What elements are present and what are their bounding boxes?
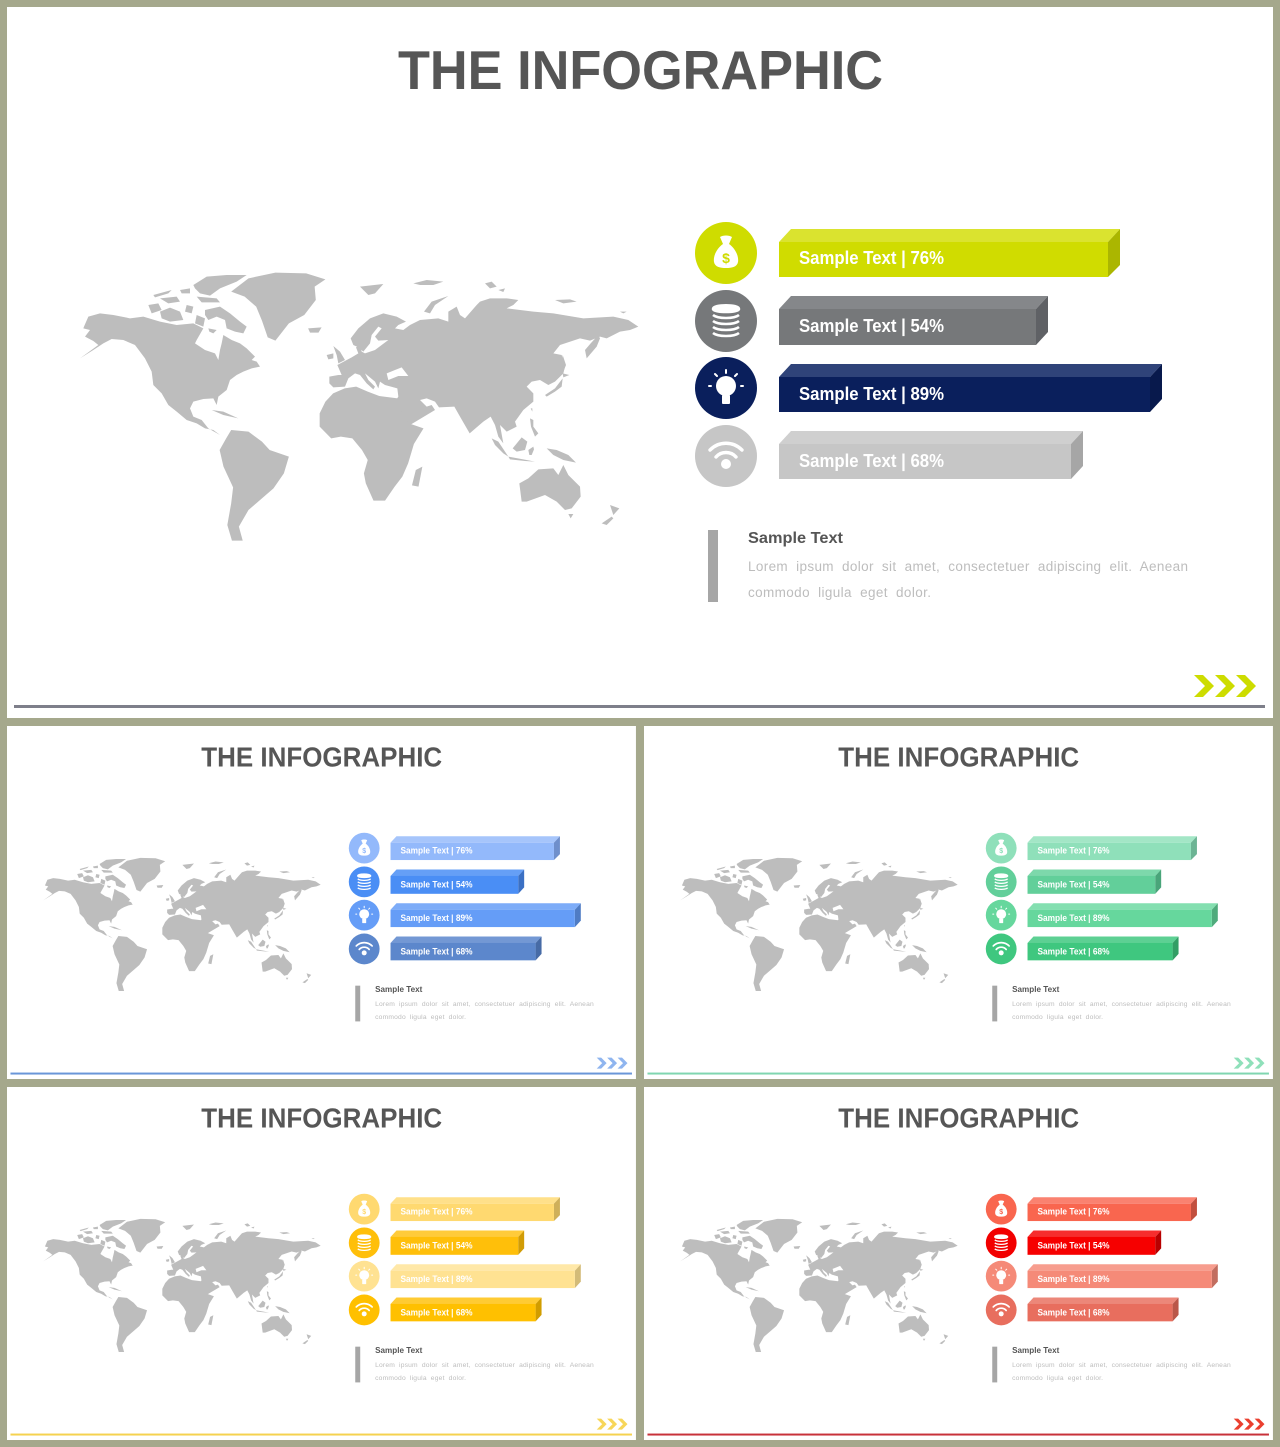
bar: 76%: Sample Text | 76% [799, 248, 944, 268]
text block [375, 1346, 594, 1382]
icon: coins [349, 867, 380, 897]
world map [43, 858, 321, 991]
title: THE INFOGRAPHIC [838, 742, 1079, 773]
text block: Sample Text [1012, 1346, 1060, 1355]
icon: coins [986, 867, 1017, 897]
icon: light bulb [986, 900, 1017, 931]
arrows [1234, 1058, 1265, 1069]
icon: wifi [349, 934, 380, 964]
bar: 68% [391, 937, 542, 960]
icon: coins [986, 1228, 1017, 1258]
title: THE INFOGRAPHIC [838, 1103, 1079, 1134]
bar: 68% [1028, 937, 1179, 960]
text block: Sample Text [375, 1346, 423, 1355]
text block: Lorem ipsum dolor sit amet, consectetuer adipiscing elit. Aenean [375, 1362, 594, 1369]
bottom rule [647, 1434, 1269, 1436]
panel: green theme [644, 726, 1273, 1079]
icon: coins [349, 1228, 380, 1258]
bar: 89%: Sample Text | 89% [400, 913, 473, 923]
arrows [597, 1058, 628, 1069]
bar: 89% [779, 364, 1162, 412]
bar: 76%: Sample Text | 76% [400, 846, 473, 856]
arrows [1234, 1419, 1265, 1430]
icon: wifi [986, 1295, 1017, 1325]
text block: Lorem ipsum dolor sit amet, consectetuer adipiscing elit. Aenean [1012, 1362, 1231, 1369]
text block: commodo ligula eget dolor. [748, 585, 931, 600]
bar: 76% [1028, 836, 1197, 860]
panel: blue theme [7, 726, 636, 1079]
panel: yellow theme [7, 1087, 636, 1440]
title: THE INFOGRAPHIC [398, 39, 883, 101]
bar: 76% [391, 836, 560, 860]
title: THE INFOGRAPHIC [201, 1103, 442, 1134]
bar: 54% [1028, 1230, 1161, 1255]
bar: 76%: Sample Text | 76% [1037, 1207, 1110, 1217]
text block: Lorem ipsum dolor sit amet, consectetuer adipiscing elit. Aenean [375, 1001, 594, 1008]
text block: Sample Text [748, 530, 844, 547]
bar: 76%: Sample Text | 76% [400, 1207, 473, 1217]
bar: 68% [1028, 1298, 1179, 1321]
text block [748, 530, 1188, 600]
icon: money bag: $ [722, 250, 730, 266]
text block: Lorem ipsum dolor sit amet, consectetuer adipiscing elit. Aenean [1012, 1001, 1231, 1008]
icon: light bulb [349, 900, 380, 931]
bar: 89%: Sample Text | 89% [1037, 1274, 1110, 1284]
icon: wifi [695, 425, 757, 487]
bottom rule [14, 705, 1265, 708]
icon: light bulb [986, 1261, 1017, 1292]
text block [1012, 985, 1231, 1021]
bar: 89% [1028, 1264, 1218, 1288]
accent bar [355, 1347, 360, 1382]
bar: 68%: Sample Text | 68% [1037, 1307, 1110, 1317]
bar: 54% [391, 1230, 524, 1255]
accent bar [992, 986, 997, 1021]
panel: main slide, lime and navy theme [7, 7, 1273, 718]
bar: 89%: Sample Text | 89% [799, 384, 944, 404]
icon: money bag: $ [999, 848, 1003, 855]
bar: 54%: Sample Text | 54% [400, 1240, 473, 1250]
bar: 76%: Sample Text | 76% [1037, 846, 1110, 856]
icon: money bag [986, 833, 1017, 864]
icon: money bag [349, 833, 380, 864]
bar: 89%: Sample Text | 89% [1037, 913, 1110, 923]
text block: commodo ligula eget dolor. [375, 1375, 466, 1382]
bar: 68%: Sample Text | 68% [799, 451, 944, 471]
bottom rule [10, 1434, 632, 1436]
text block: Sample Text [375, 985, 423, 994]
text block: commodo ligula eget dolor. [375, 1014, 466, 1021]
title: THE INFOGRAPHIC [201, 742, 442, 773]
text block: Sample Text [1012, 985, 1060, 994]
text block: commodo ligula eget dolor. [1012, 1375, 1103, 1382]
bar: 54% [391, 869, 524, 894]
bottom rule [10, 1073, 632, 1075]
bar: 68% [391, 1298, 542, 1321]
text block [1012, 1346, 1231, 1382]
bottom rule [647, 1073, 1269, 1075]
accent bar [708, 530, 718, 602]
bar: 76% [391, 1197, 560, 1221]
world map [680, 858, 958, 991]
bar: 54%: Sample Text | 54% [1037, 879, 1110, 889]
bar: 89% [1028, 903, 1218, 927]
icon: light bulb [695, 357, 757, 419]
accent bar [355, 986, 360, 1021]
icon: money bag: $ [362, 848, 366, 855]
icon: money bag: $ [362, 1209, 366, 1216]
text block: commodo ligula eget dolor. [1012, 1014, 1103, 1021]
icon: wifi [349, 1295, 380, 1325]
text block [375, 985, 594, 1021]
text block: Lorem ipsum dolor sit amet, consectetuer adipiscing elit. Aenean [748, 559, 1188, 574]
bar: 89% [391, 903, 581, 927]
bar: 68% [779, 431, 1083, 479]
bar: 89%: Sample Text | 89% [400, 1274, 473, 1284]
icon: money bag [695, 222, 757, 284]
bar: 68%: Sample Text | 68% [400, 1307, 473, 1317]
icon: money bag: $ [999, 1209, 1003, 1216]
icon: money bag [349, 1194, 380, 1225]
bar: 68%: Sample Text | 68% [400, 946, 473, 956]
accent bar [992, 1347, 997, 1382]
icon: light bulb [349, 1261, 380, 1292]
world map [80, 273, 638, 541]
world map [43, 1219, 321, 1352]
bar: 68%: Sample Text | 68% [1037, 946, 1110, 956]
bar: 89% [391, 1264, 581, 1288]
bar: 54% [779, 296, 1048, 345]
bar: 76% [779, 229, 1120, 277]
arrows [597, 1419, 628, 1430]
bar: 76% [1028, 1197, 1197, 1221]
icon: coins [695, 290, 757, 352]
bar: 54%: Sample Text | 54% [400, 879, 473, 889]
bar: 54% [1028, 869, 1161, 894]
arrows [1194, 675, 1256, 697]
panel: red theme [644, 1087, 1273, 1440]
world map [680, 1219, 958, 1352]
bar: 54%: Sample Text | 54% [799, 316, 944, 336]
icon: wifi [986, 934, 1017, 964]
icon: money bag [986, 1194, 1017, 1225]
bar: 54%: Sample Text | 54% [1037, 1240, 1110, 1250]
